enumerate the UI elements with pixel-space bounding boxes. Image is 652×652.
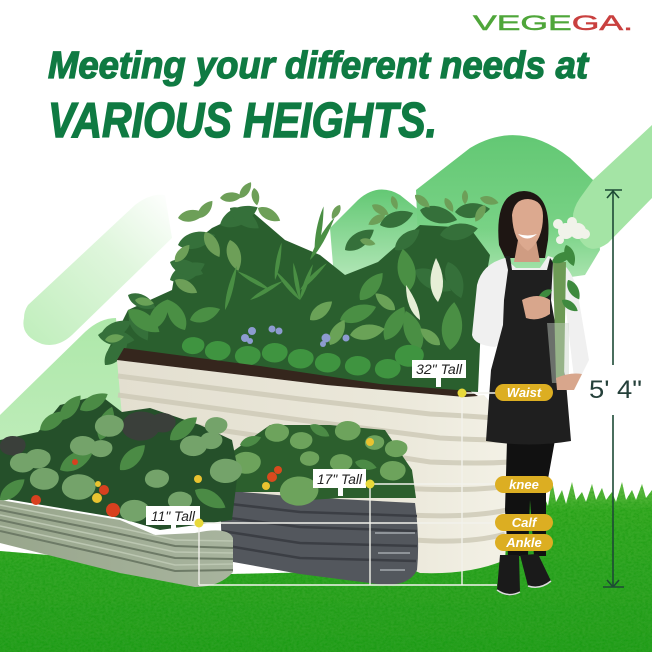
- sage green raised bed: [0, 500, 233, 587]
- callout: 32 inch: [412, 360, 466, 398]
- measurement guide lines: [199, 393, 497, 585]
- callout: 32 inch: 32" Tall: [416, 362, 463, 377]
- pill: calf: [495, 514, 553, 531]
- title: line one: Meeting your different needs at: [48, 45, 589, 87]
- title: line two: VARIOUS HEIGHTS.: [48, 94, 437, 148]
- legs: [505, 440, 555, 556]
- shoes: [497, 555, 520, 596]
- callout: 17 inch: [313, 469, 374, 496]
- tall plants: [97, 180, 500, 392]
- pill: waist: Waist: [507, 385, 542, 400]
- sage bed plants: [0, 388, 242, 530]
- logo: Vegega: VEGE GA.: [473, 12, 633, 35]
- white peace lily flowers: [406, 258, 443, 320]
- blue flowers: [241, 326, 350, 347]
- hair: [498, 191, 548, 258]
- gray raised bed: [220, 490, 418, 585]
- vase: [547, 323, 569, 383]
- decorative diagonal green stripes: [0, 125, 652, 445]
- pill: calf: Calf: [512, 515, 538, 530]
- callout: 17 inch: 17" Tall: [317, 472, 363, 487]
- pill: ankle: Ankle: [505, 535, 542, 550]
- pill: waist: [495, 384, 553, 401]
- tall cream raised bed: [117, 348, 511, 573]
- pill: knee: [495, 476, 553, 493]
- pill: ankle: [495, 534, 553, 551]
- shirt: [472, 256, 589, 378]
- face: [512, 199, 543, 251]
- height text: 5' 4": [589, 376, 642, 404]
- neck: [514, 240, 540, 262]
- callout: 11 inch: 11" Tall: [151, 509, 196, 524]
- 5 foot 4 height marker: [603, 190, 624, 587]
- gray bed plants: [225, 421, 416, 506]
- person: [472, 191, 590, 596]
- bed soil: [117, 348, 478, 397]
- grass lawn: [0, 480, 652, 652]
- callout: 11 inch: [146, 506, 204, 530]
- pill: knee: knee: [509, 477, 539, 492]
- apron: [486, 256, 571, 444]
- hands: [522, 296, 550, 319]
- flower bouquet: [553, 262, 566, 380]
